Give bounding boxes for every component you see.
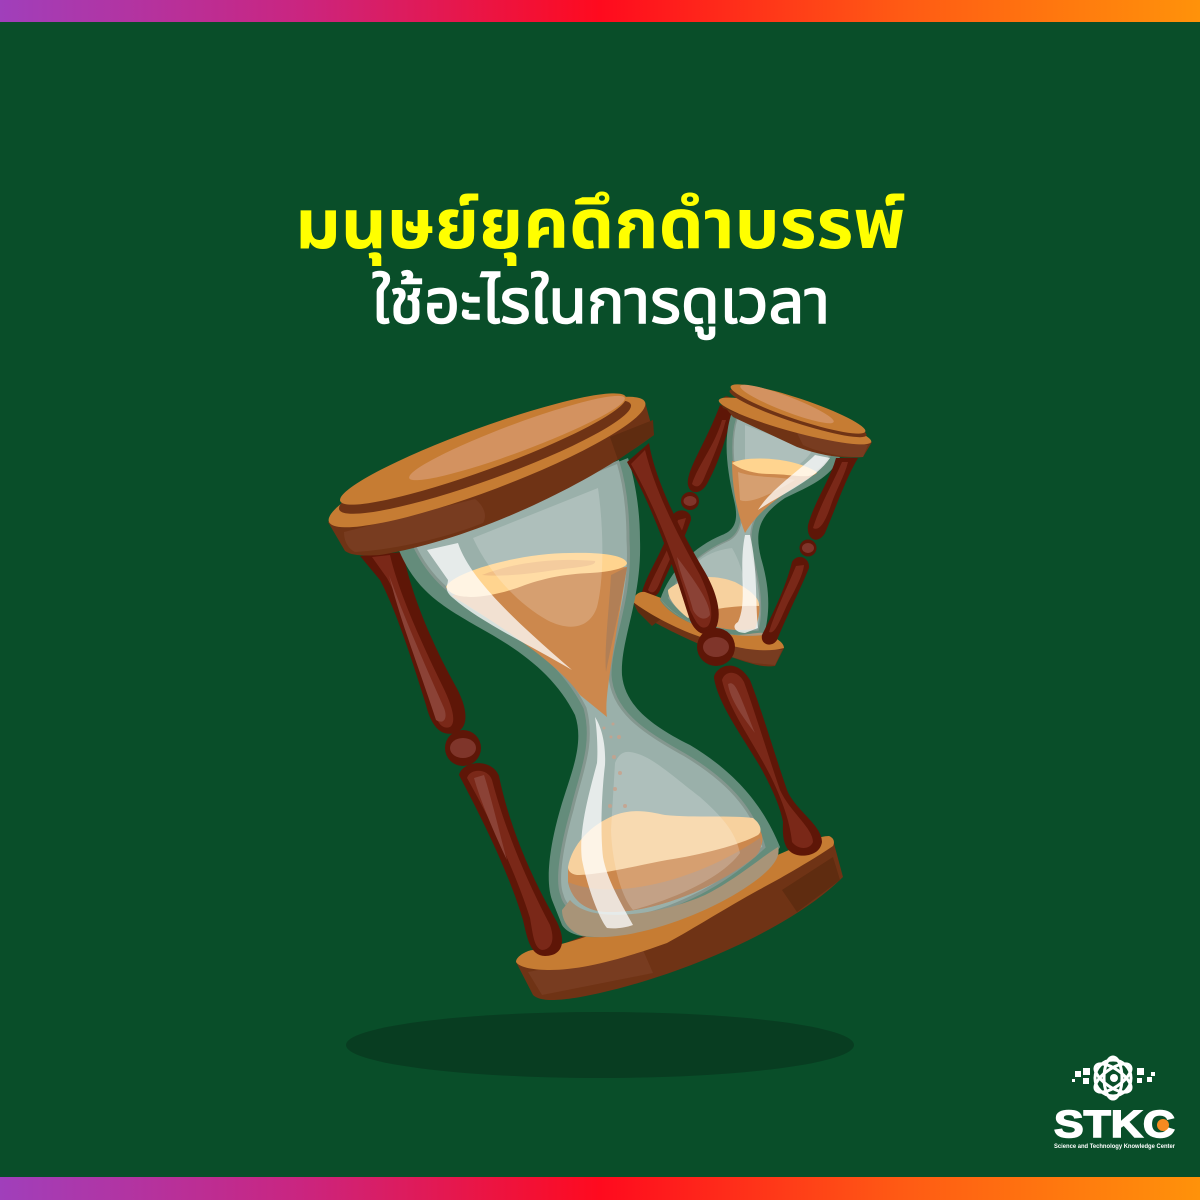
logo atom icon	[1091, 1057, 1135, 1099]
logo orange dot	[1157, 1119, 1169, 1131]
title line 1: มนุษย์ยุคดึกดำบรรพ์	[295, 186, 905, 266]
title line 2: ใช้อะไรในการดูเวลา	[372, 268, 830, 340]
bottom gradient bar	[0, 1177, 1200, 1200]
large glass inner shine top	[473, 488, 602, 627]
title	[295, 186, 905, 340]
logo tagline: Science and Technology Knowledge Center	[1054, 1144, 1176, 1150]
large upper sand	[446, 553, 627, 717]
large left leg	[360, 552, 562, 956]
logo wordmark: STKC	[1054, 1104, 1175, 1146]
small glass	[660, 415, 840, 636]
logo pixel squares	[1072, 1068, 1155, 1084]
small left leg	[642, 405, 733, 598]
ground shadow	[346, 1012, 854, 1078]
large lower sand	[568, 811, 762, 912]
large hourglass	[319, 376, 843, 1000]
large base	[516, 836, 843, 1000]
large right leg	[627, 443, 822, 856]
logo	[1054, 1057, 1176, 1150]
large highlight top	[427, 543, 572, 670]
small right leg	[762, 458, 858, 645]
small hourglass	[633, 377, 874, 666]
large glass	[398, 458, 780, 937]
large top cap	[319, 376, 655, 556]
small glass highlight	[734, 455, 830, 633]
small upper sand	[732, 459, 817, 533]
falling sand grains	[602, 722, 627, 808]
small top cap	[716, 377, 874, 458]
large highlight bottom	[581, 717, 633, 928]
small base	[633, 592, 784, 666]
small lower sand	[668, 577, 760, 630]
top gradient bar	[0, 0, 1200, 22]
large glass inner shine bottom	[611, 752, 740, 910]
